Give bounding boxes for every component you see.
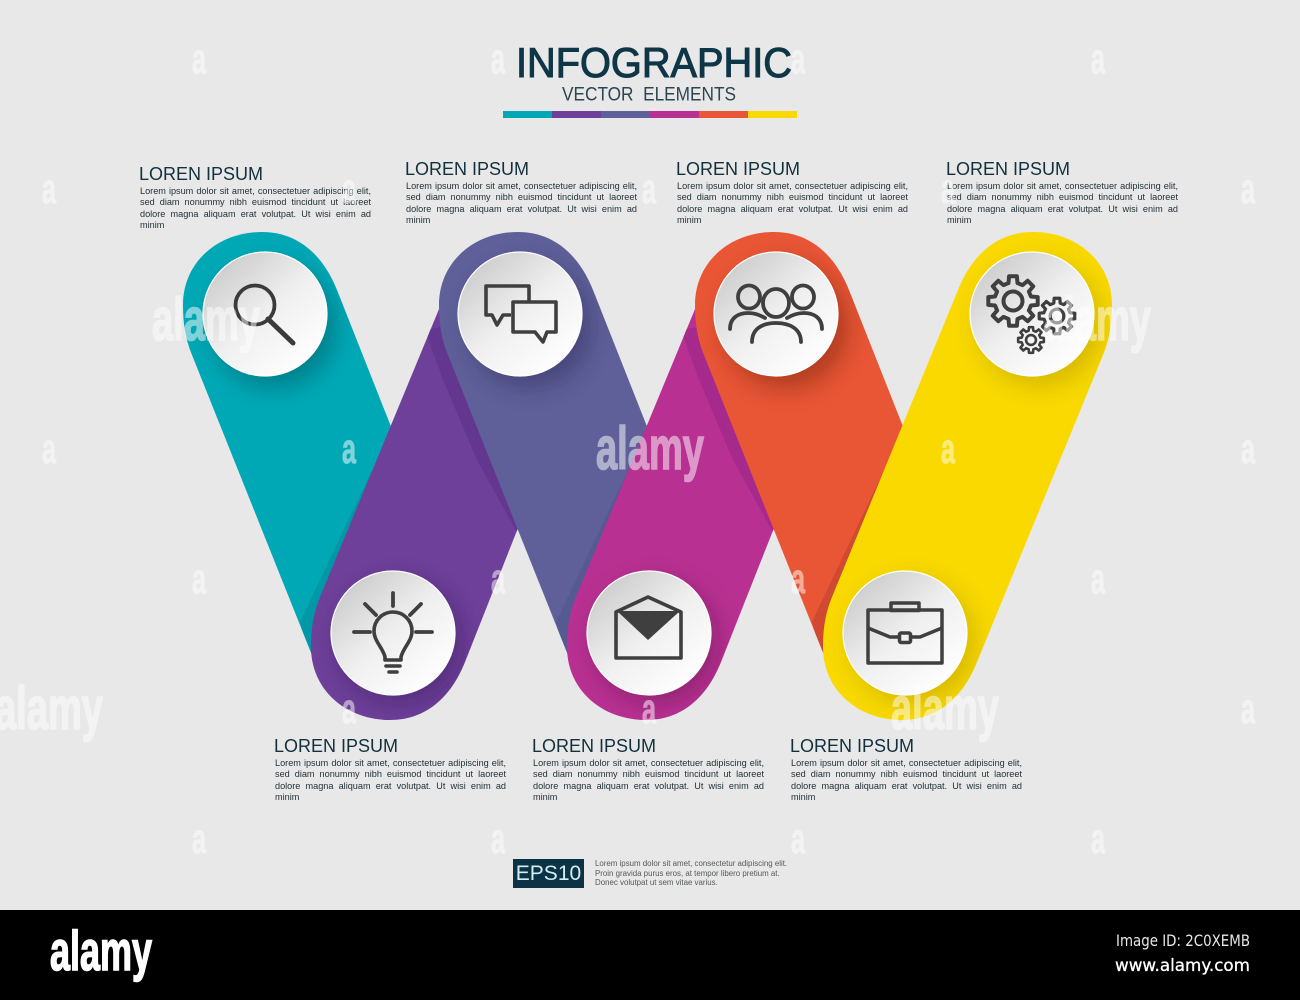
text block: top 3: Lorem ipsum dolor sit amet, consectetuer adipiscing elit, [677,181,908,191]
repeated watermark: a [42,425,56,472]
text block: top 3: LOREN IPSUM [676,159,800,179]
website: www.alamy.com [1115,956,1250,976]
black footer strip [0,910,1300,1000]
band 2: purple [311,308,518,720]
footer logo: alamy [50,919,152,982]
small footnote text: Lorem ipsum dolor sit amet, consectetur adipiscing elit. [595,859,787,868]
repeated watermark: a [791,35,805,82]
image id: Image ID: 2C0XEMB [1116,931,1250,950]
text block: bottom 3: sed diam nonummy nibh euismod tincidunt ut laoreet [791,769,1022,779]
text block: top 2: LOREN IPSUM [405,159,529,179]
text block: top 2 [405,159,637,225]
icon: gears [988,276,1075,353]
text block: bottom 2: Lorem ipsum dolor sit amet, consectetuer adipiscing elit, [533,758,764,768]
repeated watermark: alamy [891,675,999,742]
text block: top 2: Lorem ipsum dolor sit amet, consectetuer adipiscing elit, [406,181,637,191]
repeated watermark: a [342,685,356,732]
repeated watermark: a [342,165,356,212]
text block: top 3: dolore magna aliquam erat volutpat. Ut wisi enim ad [677,204,908,214]
text block: bottom 1 [274,736,506,802]
icon: speech bubbles [486,286,556,342]
text block: bottom 1: Lorem ipsum dolor sit amet, consectetuer adipiscing elit, [275,758,506,768]
small footnote text: Donec volutpat ut sem vitae varius. [595,878,718,887]
disc: chat [458,252,582,376]
text block: top 4: sed diam nonummy nibh euismod tincidunt ut laoreet [947,192,1178,202]
icon: open envelope [616,597,681,658]
text block: top 4: LOREN IPSUM [946,159,1070,179]
text block: bottom 2: sed diam nonummy nibh euismod tincidunt ut laoreet [533,769,764,779]
text block: bottom 2 [532,736,764,802]
text block: top 1 [139,164,371,230]
text block: bottom 3: minim [791,792,815,802]
text block: top 3: minim [677,215,701,225]
disc: mail [587,571,711,695]
text block: top 1: LOREN IPSUM [139,164,263,184]
text block: top 4 [946,159,1178,225]
text block: top 4: dolore magna aliquam erat volutpat. Ut wisi enim ad [947,204,1178,214]
EPS10 badge: EPS10 [516,862,581,885]
repeated watermark: a [791,555,805,602]
repeated watermark: a [342,425,356,472]
repeated watermark: a [941,425,955,472]
text block: bottom 1: minim [275,792,299,802]
text block: top 3 [676,159,908,225]
text block: bottom 2: LOREN IPSUM [532,736,656,756]
repeated watermark: a [642,685,656,732]
icon: three people [730,286,822,342]
repeated watermark: a [1241,165,1255,212]
repeated watermark: a [642,165,656,212]
repeated watermark: a [192,555,206,602]
repeated watermark: alamy [596,415,704,482]
disc: team [714,252,838,376]
repeated watermark: a [791,815,805,862]
text block: top 1: dolore magna aliquam erat volutpat. Ut wisi enim ad [140,209,371,219]
disc: search [203,252,327,376]
title: INFOGRAPHIC [516,39,792,86]
text block: bottom 1: LOREN IPSUM [274,736,398,756]
text block: top 2: dolore magna aliquam erat volutpat. Ut wisi enim ad [406,204,637,214]
text block: bottom 1: dolore magna aliquam erat volutpat. Ut wisi enim ad [275,781,506,791]
repeated watermark: a [1091,35,1105,82]
text block: top 4: minim [947,215,971,225]
repeated watermark: a [491,815,505,862]
W-shaped ribbon diagram [183,47,1112,720]
band 5: orange [695,232,902,654]
text block: bottom 3 [790,736,1022,802]
repeated watermark: alamy [152,286,260,353]
text block: top 4: Lorem ipsum dolor sit amet, consectetuer adipiscing elit, [947,181,1178,191]
band 3: slate blue [439,232,647,654]
icon: magnifying glass [236,286,293,343]
repeated watermark: alamy [1043,286,1151,353]
text block: bottom 3: Lorem ipsum dolor sit amet, consectetuer adipiscing elit, [791,758,1022,768]
band 1: teal [183,232,391,654]
disc: settings [970,252,1094,376]
small footnote text [595,859,787,887]
text block: top 2: sed diam nonummy nibh euismod tincidunt ut laoreet [406,192,637,202]
repeated watermark: a [1091,815,1105,862]
small footnote text: Proin gravida purus eros, at tempor libero pretium at. [595,869,780,878]
text block: top 1: sed diam nonummy nibh euismod tincidunt ut laoreet [140,197,371,207]
text block: bottom 2: dolore magna aliquam erat volutpat. Ut wisi enim ad [533,781,764,791]
subtitle: VECTOR ELEMENTS [562,84,736,106]
repeated watermark: a [1241,685,1255,732]
disc: business [843,571,967,695]
disc: idea [331,571,455,695]
repeated watermark: alamy [0,675,103,742]
icon: briefcase [868,603,942,663]
text block: top 1: Lorem ipsum dolor sit amet, consectetuer adipiscing elit, [140,186,371,196]
text block: top 2: minim [406,215,430,225]
icon: light bulb [354,593,432,672]
repeated watermark: a [491,35,505,82]
repeated watermark: a [941,165,955,212]
text block: bottom 3: dolore magna aliquam erat volutpat. Ut wisi enim ad [791,781,1022,791]
repeated watermark: a [1241,425,1255,472]
text block: bottom 3: LOREN IPSUM [790,736,914,756]
text block: top 3: sed diam nonummy nibh euismod tincidunt ut laoreet [677,192,908,202]
repeated watermark: a [42,165,56,212]
repeated watermark: a [192,35,206,82]
repeated watermark: a [192,815,206,862]
title colour bar [503,111,797,118]
text block: top 1: minim [140,220,164,230]
band 6: yellow [823,232,1112,720]
text block: bottom 2: minim [533,792,557,802]
repeated watermark: a [491,555,505,602]
band 4: magenta [567,308,774,720]
repeated watermark: a [1091,555,1105,602]
text block: bottom 1: sed diam nonummy nibh euismod tincidunt ut laoreet [275,769,506,779]
repeated watermark [0,35,1255,862]
